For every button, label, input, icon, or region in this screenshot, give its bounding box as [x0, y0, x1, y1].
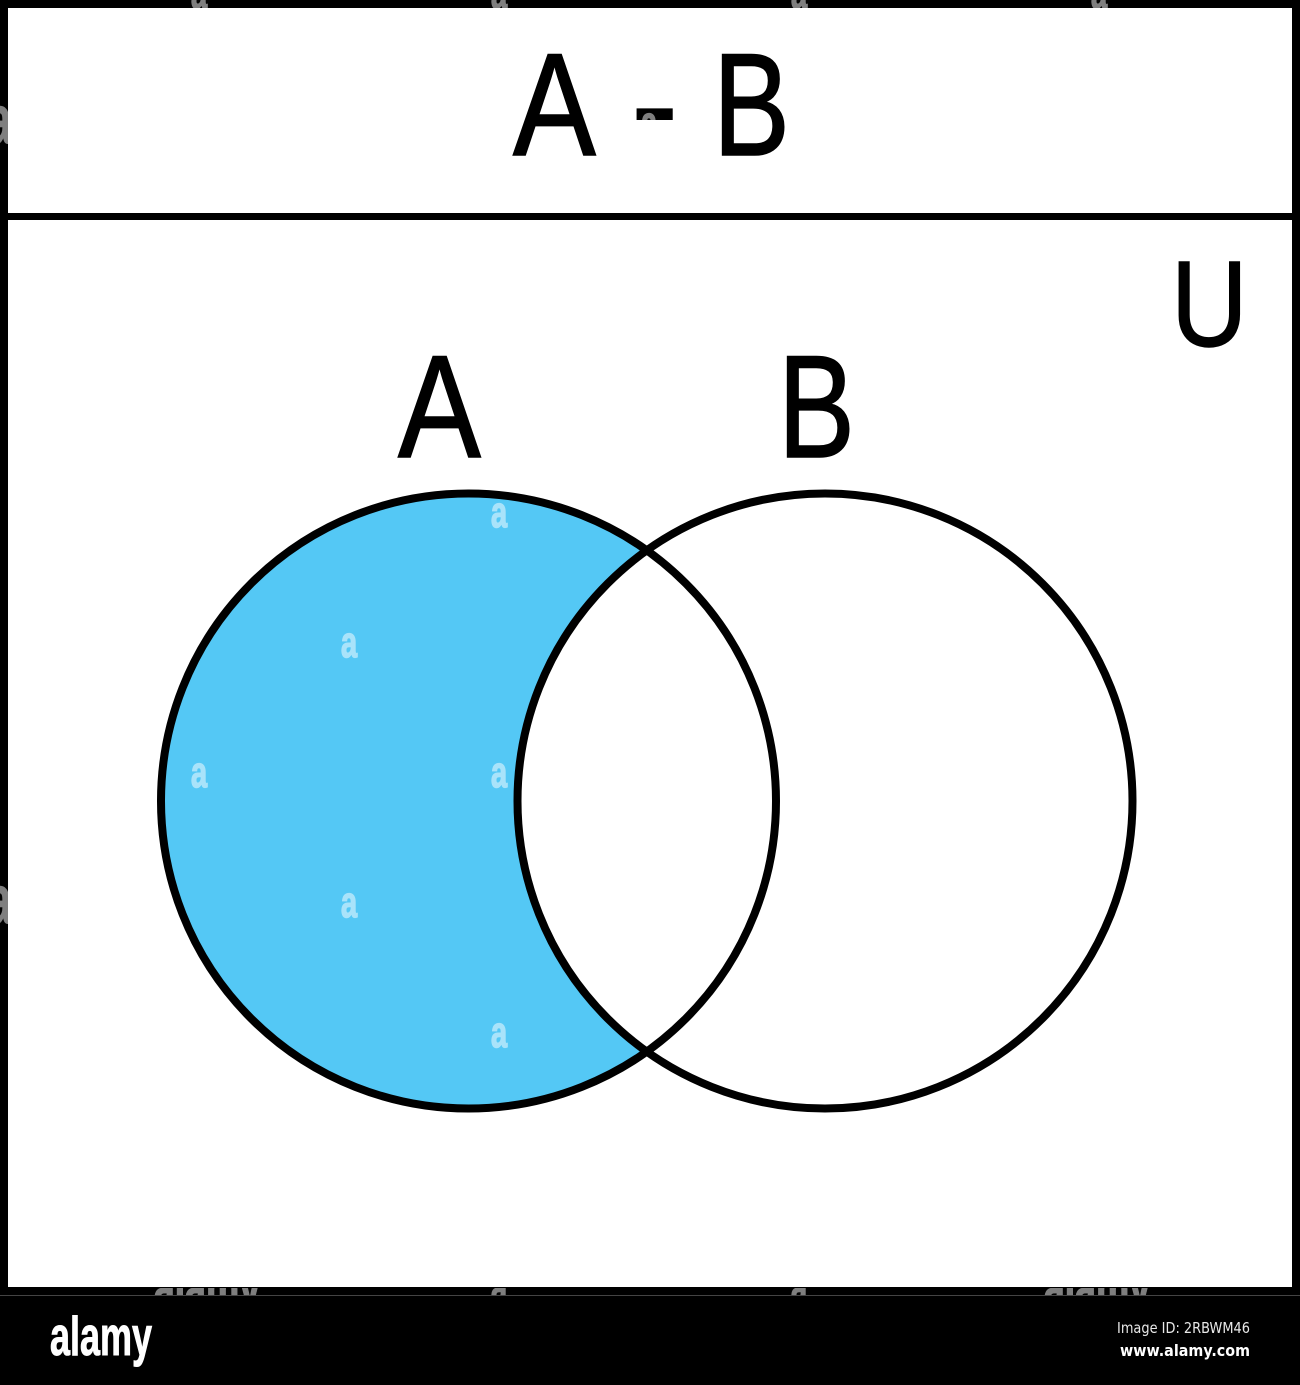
- venn diagram: A minus B shaded: [161, 494, 1132, 1108]
- watermark marks: a: [191, 747, 207, 796]
- watermark marks: alamy: [1044, 1256, 1150, 1318]
- watermark marks: a: [341, 877, 357, 926]
- title: A - B: [513, 20, 790, 186]
- watermark marks: a: [791, 1262, 807, 1311]
- circle B fill: [518, 494, 1132, 1108]
- website: www.alamy.com: [1120, 1341, 1250, 1360]
- footer bar: [0, 1287, 1300, 1385]
- watermark marks: a: [341, 617, 357, 666]
- set label A: A: [398, 324, 481, 488]
- watermark marks: a: [491, 487, 507, 536]
- watermark marks: alamy: [154, 1256, 260, 1318]
- footer separator line: [0, 1295, 1300, 1296]
- title: A - B: A: [513, 22, 596, 186]
- circle B outline: [518, 494, 1132, 1108]
- circle A fill: [161, 494, 776, 1108]
- circle A outline: [161, 494, 776, 1108]
- watermark marks: a: [641, 97, 657, 146]
- set label B: B: [778, 325, 855, 488]
- title: A - B: B: [713, 23, 790, 186]
- image id: Image ID: 2RBWM46: [1117, 1319, 1250, 1337]
- universal set label U: U: [1171, 236, 1248, 373]
- watermark marks: a: [491, 1262, 507, 1311]
- alamy logo: alamy: [50, 1305, 152, 1367]
- watermark marks: a: [491, 1007, 507, 1056]
- title: A - B: -: [630, 20, 679, 186]
- watermark marks: a: [491, 747, 507, 796]
